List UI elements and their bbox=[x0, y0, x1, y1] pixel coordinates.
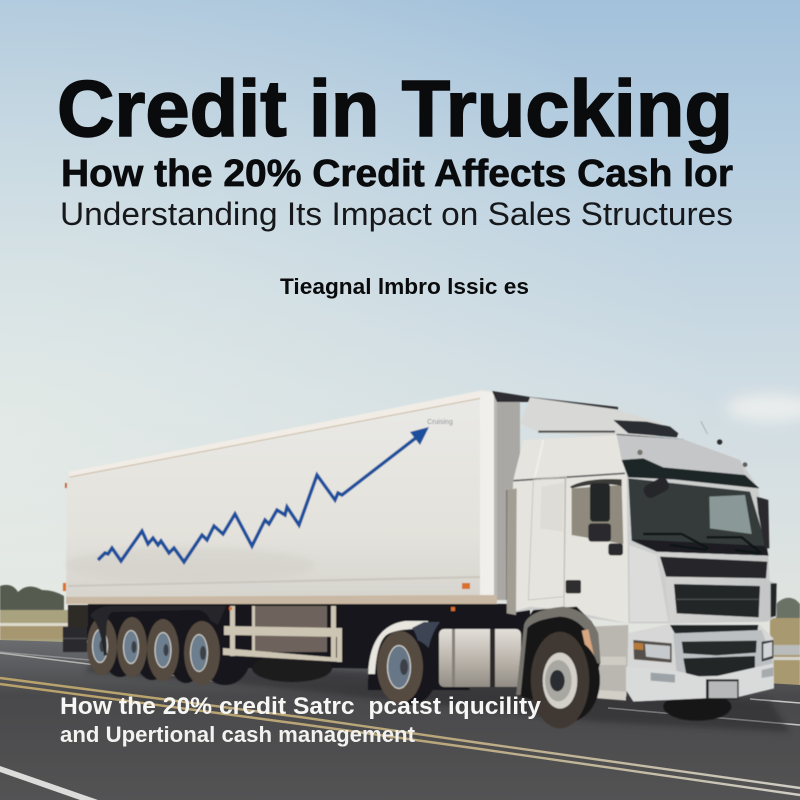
number plate bbox=[706, 679, 739, 699]
rear axle wheels bbox=[87, 606, 251, 685]
front axle shadow wheel bbox=[663, 693, 731, 721]
truck bbox=[63, 390, 777, 728]
road bbox=[0, 640, 800, 800]
cab shell bbox=[507, 435, 772, 623]
steps and lower cab bbox=[592, 625, 628, 701]
door window bbox=[572, 485, 623, 544]
truck shadow bbox=[85, 655, 790, 732]
tractor rear wheel and mudguard bbox=[368, 621, 470, 705]
far-side wheels bbox=[252, 654, 332, 682]
small heading: Tieagnal lmbro lssic es bbox=[280, 274, 529, 299]
subtitle: How the 20% Credit Affects Cash lor bbox=[61, 153, 733, 195]
front grille bbox=[656, 553, 777, 623]
side guard rails bbox=[223, 606, 342, 662]
trailer body: Cruising bbox=[427, 419, 453, 426]
fuel tank bbox=[439, 629, 521, 687]
trailer body bbox=[63, 390, 497, 611]
wheel 4 bbox=[184, 621, 220, 685]
rear underrun bumper bbox=[63, 605, 88, 652]
storage box bbox=[255, 606, 327, 652]
chart arrowhead bbox=[410, 427, 429, 445]
side mirror bbox=[570, 479, 623, 555]
gap between trailer and cab bbox=[492, 391, 618, 600]
bottom caption line 1: How the 20% credit Satrc pcatst iqucility bbox=[60, 693, 542, 720]
tractor cab bbox=[507, 397, 777, 728]
front wheel arch bbox=[517, 607, 600, 700]
door handle bbox=[566, 580, 581, 593]
road markings: double centre line bbox=[0, 678, 800, 795]
chassis under the trailer bbox=[86, 604, 530, 672]
wheel 1 bbox=[87, 617, 117, 675]
main title: Credit in Trucking bbox=[57, 64, 733, 153]
chart line on trailer bbox=[98, 427, 429, 562]
windscreen bbox=[622, 421, 769, 556]
headlights bbox=[633, 640, 672, 663]
right lane lines bbox=[608, 699, 800, 725]
wheel 3 bbox=[147, 619, 179, 681]
landscape: trees, fields and guardrail bbox=[0, 585, 800, 690]
roof deflector bbox=[520, 397, 683, 440]
tagline: Understanding Its Impact on Sales Structures bbox=[60, 196, 733, 232]
front wheel bbox=[531, 632, 600, 728]
bottom caption line 2: and Upertional cash management bbox=[60, 722, 416, 747]
white road edge line bbox=[0, 766, 98, 800]
lower bumper bbox=[626, 663, 774, 702]
wheel 2 bbox=[117, 617, 147, 677]
front bumper bbox=[626, 624, 774, 702]
